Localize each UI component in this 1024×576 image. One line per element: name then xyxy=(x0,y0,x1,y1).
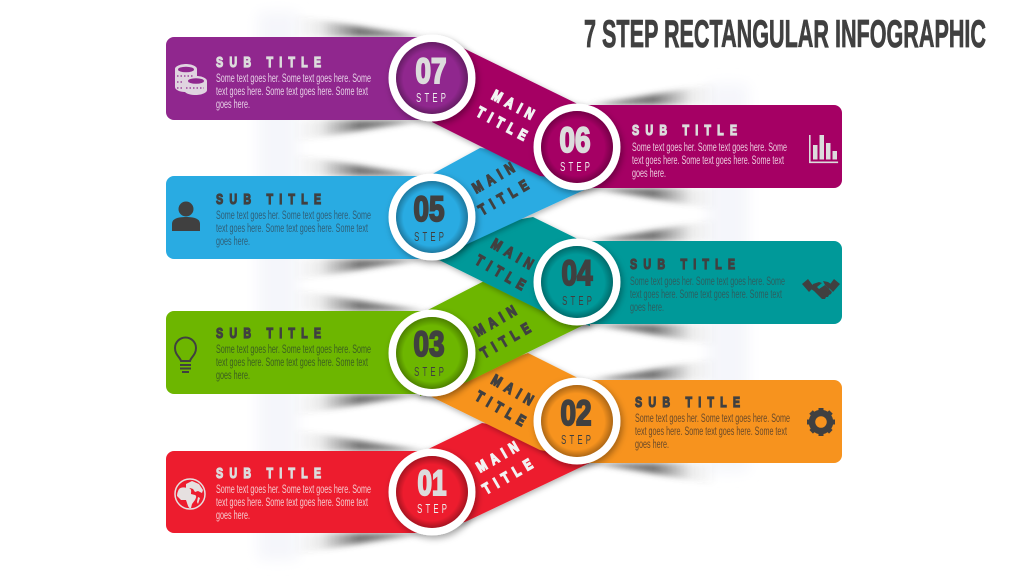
main title: step 5: TITLE xyxy=(476,176,531,218)
diagonal connector: magenta step 6 xyxy=(432,38,590,182)
panel: step 3 bar xyxy=(166,311,445,394)
text block: step 7: SUB TITLE xyxy=(216,53,321,70)
text block: step 2: text goes here. Some text goes here. Some text xyxy=(635,426,787,438)
text block: step 3: goes here. xyxy=(216,370,250,382)
step 7 badge: 07 xyxy=(416,52,446,91)
step 4 badge: 04 xyxy=(562,254,593,293)
panel: step 2 bar xyxy=(565,380,842,463)
step 1 badge: STEP xyxy=(417,503,447,517)
main title: step 3: TITLE xyxy=(478,319,533,361)
main title: step 3 xyxy=(467,300,533,361)
step 6 badge: 06 xyxy=(560,121,590,160)
diagonal connector: blue step 5 xyxy=(425,148,597,258)
panel: step 6 bar xyxy=(565,105,842,188)
step 4 badge: STEP xyxy=(562,295,592,309)
text block: step 6: Some text goes her. Some text goes here. Some xyxy=(632,142,787,154)
text block: step 1: SUB TITLE xyxy=(216,464,321,481)
text block: step 3: Some text goes her. Some text goes here. Some xyxy=(216,344,371,356)
text block: step 7 xyxy=(216,53,371,111)
text block: step 3: SUB TITLE xyxy=(216,324,321,341)
main title: step 7: MAIN xyxy=(489,87,537,123)
text block: step 5: text goes here. Some text goes here. Some text xyxy=(216,223,368,235)
step 1 badge xyxy=(388,448,476,536)
pale backdrop strip right xyxy=(708,84,748,472)
text block: step 1: Some text goes her. Some text goes here. Some xyxy=(216,484,371,496)
text block: step 4: Some text goes her. Some text goes here. Some xyxy=(630,276,785,288)
text block: step 2: SUB TITLE xyxy=(635,393,740,410)
panel: step 4 bar xyxy=(565,241,842,324)
step 3 badge: 03 xyxy=(414,325,444,364)
icon: globe xyxy=(175,479,205,509)
text block: step 6: goes here. xyxy=(632,168,666,180)
step 7 badge: STEP xyxy=(416,92,446,106)
text block: step 6: text goes here. Some text goes here. Some text xyxy=(632,155,784,167)
text block: step 2: Some text goes her. Some text goes here. Some xyxy=(635,413,790,425)
main title: step 2 xyxy=(473,368,540,430)
step 2 badge: STEP xyxy=(561,434,591,448)
step 3 badge: STEP xyxy=(414,366,444,380)
main title: step 4 xyxy=(473,232,540,294)
step 6 badge xyxy=(534,104,620,190)
text block: step 4 xyxy=(630,255,785,314)
text block: step 1: text goes here. Some text goes here. Some text xyxy=(216,497,368,509)
panel: step 5 bar xyxy=(166,176,445,259)
step 3 badge xyxy=(388,310,476,396)
icon: person xyxy=(172,202,200,231)
icon: bar chart xyxy=(809,135,838,163)
step 5 badge xyxy=(388,174,476,260)
step 5 badge: STEP xyxy=(414,231,444,245)
text block: step 2: goes here. xyxy=(635,439,669,451)
main title: step 1: MAIN xyxy=(473,438,521,476)
text block: step 5: SUB TITLE xyxy=(216,190,321,207)
text block: step 7: text goes here. Some text goes here. Some text xyxy=(216,86,368,98)
panel: step 7 bar xyxy=(166,37,445,120)
pale backdrop strip left xyxy=(258,12,298,560)
icon: handshake xyxy=(802,279,840,299)
step 7 badge xyxy=(388,34,476,122)
text block: step 6: SUB TITLE xyxy=(632,121,737,138)
main title: step 2: MAIN xyxy=(488,371,536,409)
icon: gear xyxy=(807,408,835,436)
main title: step 7: TITLE xyxy=(474,103,530,144)
diagonal connector: red step 1 xyxy=(420,423,600,530)
diagonal connector: orange step 2 xyxy=(420,353,590,460)
tapered band shadows xyxy=(294,16,716,554)
text block: step 4: goes here. xyxy=(630,302,664,314)
text block: step 4: SUB TITLE xyxy=(630,255,735,272)
text block: step 2 xyxy=(635,393,790,451)
main title: step 5: MAIN xyxy=(469,159,517,197)
panel: step 1 bar xyxy=(166,451,445,533)
main title: step 4: TITLE xyxy=(473,251,529,294)
step 1 badge: 01 xyxy=(418,464,446,503)
main title: step 1 xyxy=(469,436,535,497)
text block: step 1: goes here. xyxy=(216,510,250,522)
main title: step 5 xyxy=(465,157,531,218)
step 5 badge: 05 xyxy=(414,190,444,229)
text block: step 3 xyxy=(216,324,371,382)
step 4 badge xyxy=(534,238,620,326)
text block: step 7: goes here. xyxy=(216,99,250,111)
main title: step 3: MAIN xyxy=(471,302,519,340)
text block: step 5: goes here. xyxy=(216,236,250,248)
icon: coins xyxy=(175,64,207,95)
diagonal connector: teal step 4 xyxy=(430,217,590,326)
main title: step 2: TITLE xyxy=(473,387,529,430)
main title: step 4: MAIN xyxy=(488,235,536,273)
text block: step 5 xyxy=(216,190,371,248)
step 2 badge: 02 xyxy=(560,394,592,433)
diagonal connector: green step 3 xyxy=(420,278,600,396)
icon: light bulb xyxy=(175,338,196,372)
text block: step 6 xyxy=(632,121,787,180)
text block: step 3: text goes here. Some text goes here. Some text xyxy=(216,357,368,369)
step 2 badge xyxy=(534,378,620,464)
main title: step 1: TITLE xyxy=(480,455,535,497)
text block: step 7: Some text goes her. Some text goes here. Some xyxy=(216,73,371,85)
main title: step 7 xyxy=(474,84,540,144)
text block: step 1 xyxy=(216,464,371,522)
step 6 badge: STEP xyxy=(560,161,590,175)
text block: step 4: text goes here. Some text goes here. Some text xyxy=(630,289,782,301)
text block: step 5: Some text goes her. Some text goes here. Some xyxy=(216,210,371,222)
